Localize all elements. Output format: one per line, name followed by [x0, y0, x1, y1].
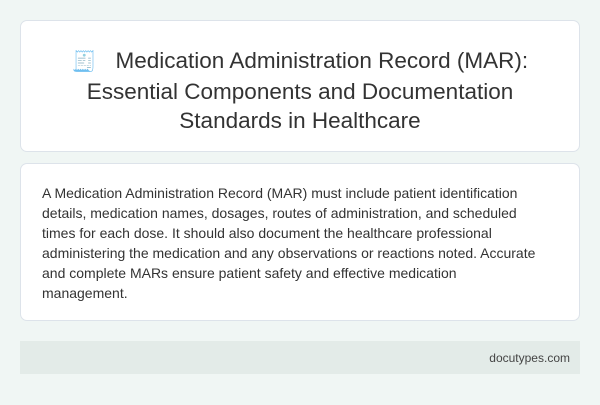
panel: description — [20, 163, 580, 321]
text block: A Medication Administration Record (MAR) must include patient identification details, medication names, dosages, routes of administration, and scheduled times for each dose. It should also document the healthcare professional administering the medication and any observations or reactions noted. Accurate and complete MARs ensure patient safety and effective medication management. — [42, 185, 535, 301]
title: 🧾 Medication Administration Record (MAR): Essential Components and Documentation Standards in Healthcare — [72, 48, 528, 133]
footer: docutypes.com — [489, 351, 570, 365]
panel: title — [20, 20, 580, 152]
footer — [20, 341, 580, 374]
